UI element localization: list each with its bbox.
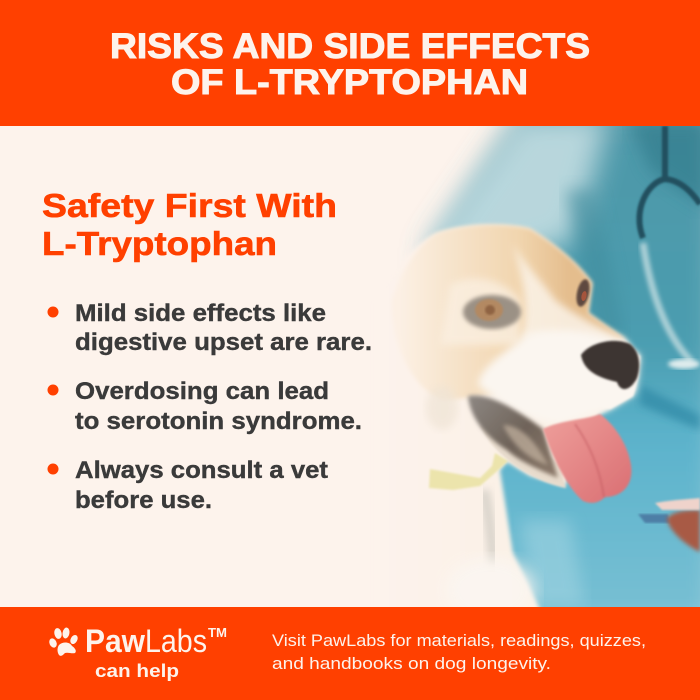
bullet 3: Always consult a vet xyxy=(75,457,328,484)
title: RISKS AND SIDE EFFECTS xyxy=(110,27,590,66)
bullet 1: Mild side effects like xyxy=(75,300,326,327)
dog mouth xyxy=(468,395,558,478)
heading: Safety First With xyxy=(42,187,337,224)
footer message: and handbooks on dog longevity. xyxy=(272,654,551,673)
bullet 1 xyxy=(48,300,372,356)
logo tagline: can help xyxy=(95,661,179,681)
icon: paw xyxy=(48,627,79,656)
dog white blaze xyxy=(512,243,630,350)
dog head tan fur xyxy=(392,225,625,400)
illustration: beagle dog xyxy=(400,222,646,607)
bullet 2: Overdosing can lead xyxy=(75,378,329,405)
panel: footer xyxy=(0,607,700,700)
logo wordmark: Paw xyxy=(85,623,145,659)
icon: blurred hand xyxy=(638,498,700,552)
title: OF L-TRYPTOPHAN xyxy=(171,63,528,102)
dog cheek shade xyxy=(426,396,457,429)
panel: title banner xyxy=(0,0,700,126)
dog right eye xyxy=(574,278,592,308)
dog body and chest xyxy=(410,222,643,607)
bullet list xyxy=(48,300,372,514)
panel: cream background xyxy=(0,126,700,607)
dog collar xyxy=(429,453,508,490)
dog tag chain xyxy=(484,490,494,565)
heading: L-Tryptophan xyxy=(42,225,277,262)
logo wordmark: Labs xyxy=(145,623,207,659)
dog nose xyxy=(581,341,639,389)
dog lower jaw xyxy=(480,425,566,488)
dog tongue xyxy=(543,414,631,503)
dog white muzzle xyxy=(478,330,640,425)
icon: stethoscope xyxy=(639,126,700,369)
bullet 3: before use. xyxy=(75,487,212,514)
dog white chest fur xyxy=(468,552,544,607)
bullet 1: digestive upset are rare. xyxy=(75,329,372,356)
bullet 2: to serotonin syndrome. xyxy=(75,408,362,435)
logo wordmark: TM xyxy=(208,626,227,640)
dog left eye xyxy=(463,295,521,329)
bullet 2 xyxy=(48,378,362,435)
bullet 3 xyxy=(48,457,328,514)
panel: photo background of vet in teal scrubs xyxy=(430,100,700,630)
footer message: Visit PawLabs for materials, readings, quizzes, xyxy=(272,631,646,650)
